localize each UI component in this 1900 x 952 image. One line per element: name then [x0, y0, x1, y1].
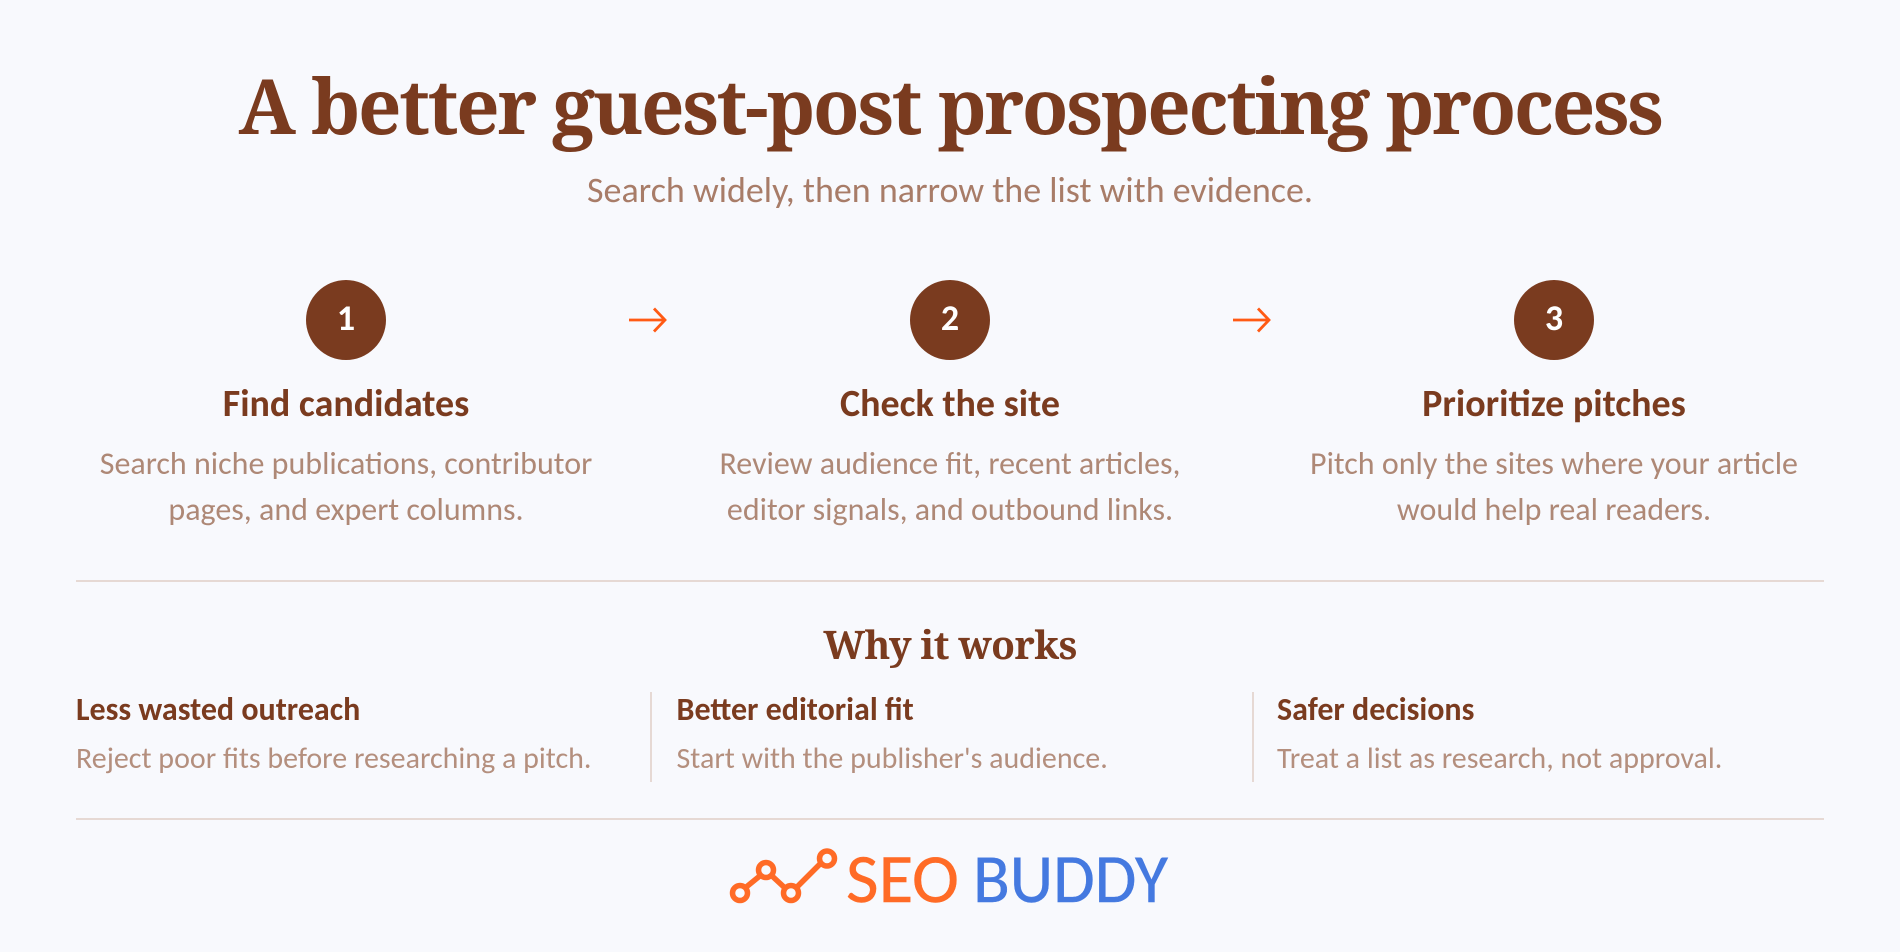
- benefit 2 heading: Better editorial fit: [676, 690, 914, 729]
- benefit 3 text: Treat a list as research, not approval.: [1277, 740, 1722, 777]
- step number 2: [910, 280, 990, 360]
- step 1: find candidates: [100, 280, 592, 529]
- icon: line chart: [732, 851, 834, 900]
- step 2 description: [719, 444, 1181, 529]
- step 2 heading: Check the site: [840, 381, 1060, 427]
- step 2 description: editor signals, and outbound links.: [727, 490, 1173, 529]
- subtitle: Search widely, then narrow the list with evidence.: [587, 168, 1313, 212]
- step number 2: 2: [941, 296, 959, 340]
- step 3: prioritize pitches: [1310, 280, 1798, 529]
- benefit: better editorial fit: [676, 690, 1108, 777]
- step 1 description: Search niche publications, contributor: [100, 444, 592, 483]
- step 3 description: would help real readers.: [1397, 490, 1711, 529]
- benefit: less wasted outreach: [76, 690, 591, 777]
- step 3 description: [1310, 444, 1798, 529]
- step number 3: [1514, 280, 1594, 360]
- benefit 1 text: Reject poor fits before researching a pitch.: [76, 740, 591, 777]
- step 1 heading: Find candidates: [223, 381, 469, 427]
- benefit 3 heading: Safer decisions: [1277, 690, 1474, 729]
- benefit 1 heading: Less wasted outreach: [76, 690, 360, 729]
- benefit: safer decisions: [1277, 690, 1722, 777]
- title: A better guest-post prospecting process: [239, 54, 1661, 157]
- step 3 description: Pitch only the sites where your article: [1310, 444, 1798, 483]
- step 1 description: [100, 444, 592, 529]
- section heading: why it works: Why it works: [823, 618, 1077, 671]
- step 2: check the site: [719, 280, 1181, 529]
- step number 1: [306, 280, 386, 360]
- arrow: step 1 to step 2: [629, 308, 667, 332]
- step number 1: 1: [337, 296, 355, 340]
- logo: SEO Buddy: [730, 840, 1168, 912]
- arrow: step 2 to step 3: [1233, 308, 1271, 332]
- step 3 heading: Prioritize pitches: [1422, 381, 1686, 427]
- step 1 description: pages, and expert columns.: [168, 490, 524, 529]
- step 2 description: Review audience fit, recent articles,: [719, 444, 1181, 483]
- benefit 2 text: Start with the publisher's audience.: [676, 740, 1108, 777]
- step number 3: 3: [1545, 296, 1563, 340]
